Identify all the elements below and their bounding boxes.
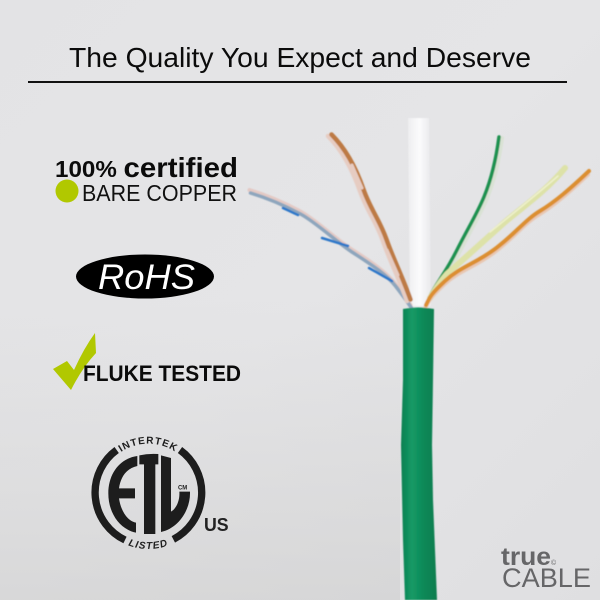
yellow twisted pair	[430, 168, 565, 298]
badge: RoHS: RoHS	[98, 258, 195, 297]
green cable jacket	[401, 308, 437, 600]
letter E	[108, 456, 137, 533]
logo word true: true	[501, 543, 551, 571]
cable photograph illustration	[250, 118, 589, 600]
letter T	[139, 454, 158, 534]
badge: Fluke tested	[53, 333, 241, 390]
orange twisted pair	[425, 171, 589, 308]
letter L	[161, 455, 190, 532]
badge: RoHS	[76, 254, 214, 298]
intertek arc text: INTERTEK	[118, 436, 178, 452]
logo: trueCABLE	[501, 543, 591, 593]
US text: US	[204, 514, 229, 535]
brown twisted pair	[328, 134, 410, 301]
outer ring	[95, 450, 202, 540]
logo word CABLE: CABLE	[502, 563, 591, 593]
icon: check mark	[53, 333, 96, 390]
CM mark: CM	[178, 485, 187, 491]
copyright mark: ©	[551, 559, 557, 567]
blue twisted pair	[250, 190, 412, 308]
white separator spline	[408, 118, 431, 306]
badge: Intertek ETL listed logo	[91, 436, 229, 549]
certified heading: 100% certified	[55, 152, 238, 183]
green twisted pair	[431, 137, 502, 295]
icon: green dot	[56, 180, 78, 202]
bare copper text: BARE COPPER	[82, 180, 237, 206]
badge: 100% certified bare copper	[55, 152, 238, 206]
listed arc text: LISTED	[128, 539, 167, 549]
fluke tested text: FLUKE TESTED	[83, 361, 241, 386]
title: The Quality You Expect and Deserve	[69, 42, 531, 73]
